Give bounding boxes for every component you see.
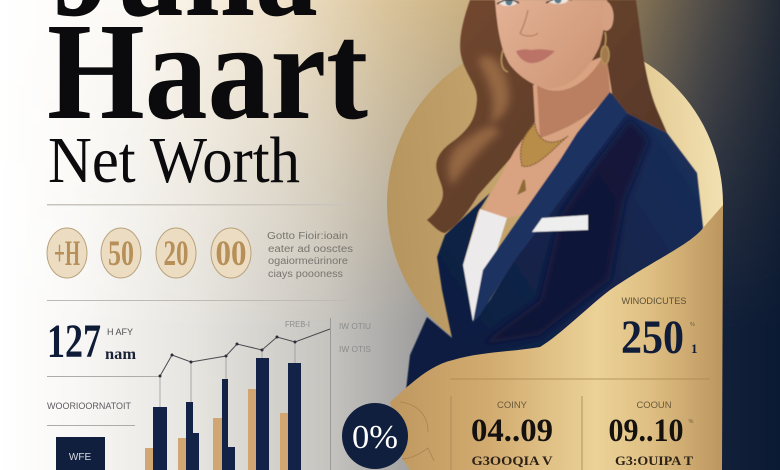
lips bbox=[516, 49, 555, 63]
title: name and net worth: Net Worth bbox=[48, 124, 300, 197]
stat: 127: H AFY bbox=[107, 327, 133, 337]
coin 2: 50 bbox=[108, 233, 134, 273]
stat: cooun: G3:OUIPA T bbox=[615, 453, 693, 468]
coin description text: ogaiormeürinore bbox=[268, 256, 348, 267]
eyes bbox=[497, 0, 572, 6]
small label: WOORIOORNATOIT bbox=[47, 401, 131, 412]
coin row bbox=[47, 228, 251, 278]
navy label box bbox=[56, 437, 105, 470]
back hair bbox=[427, 0, 667, 233]
chart labels: IW OTIS bbox=[339, 344, 371, 354]
lapel bbox=[473, 92, 627, 322]
coin description text bbox=[267, 231, 353, 280]
nose bbox=[520, 10, 538, 36]
right ear bbox=[602, 0, 614, 31]
jacket bbox=[406, 92, 703, 390]
jacket shadow bbox=[480, 118, 650, 345]
stat: cooun: 09..10 bbox=[608, 413, 684, 449]
neck shadow bbox=[537, 50, 610, 138]
stat: 127: 127 bbox=[47, 315, 101, 368]
stat: 250: 1 bbox=[691, 341, 698, 356]
coin 1: +H bbox=[54, 233, 80, 273]
coin 3 bbox=[156, 228, 196, 278]
coin 1 bbox=[47, 228, 87, 278]
neck and chest bbox=[482, 55, 612, 218]
stat: 250: 250 bbox=[621, 311, 684, 364]
chart labels bbox=[285, 319, 371, 354]
stat: cooun: COOUN bbox=[636, 400, 672, 410]
bars bbox=[145, 358, 301, 470]
line series bbox=[158, 329, 330, 407]
coin description text: ciays poooness bbox=[268, 269, 343, 280]
necklace bbox=[519, 124, 568, 193]
stat: coiny bbox=[471, 400, 553, 468]
stat: cooun bbox=[608, 400, 694, 468]
panel dividers bbox=[450, 379, 710, 470]
stat: 250: % bbox=[690, 322, 695, 328]
stat: coiny: 04..09 bbox=[471, 413, 553, 449]
percent badge: 0% bbox=[352, 419, 398, 456]
coin 3: 20 bbox=[164, 233, 188, 273]
coin description text: Gotto Fioir:ioain bbox=[267, 231, 348, 242]
pocket square bbox=[532, 215, 588, 232]
coin description text: eater ad oosctes bbox=[268, 244, 353, 255]
highlights in hair bbox=[448, 56, 509, 185]
stat: 127: nam bbox=[105, 346, 137, 363]
coin 2 bbox=[101, 228, 141, 278]
combo chart bbox=[145, 318, 371, 470]
stat: coiny: G3OOQIA V bbox=[472, 453, 553, 468]
face bbox=[495, 0, 607, 88]
white top bbox=[463, 209, 507, 320]
chart labels: IW OTIU bbox=[339, 321, 371, 331]
badge arcs bbox=[400, 402, 434, 461]
stat: coiny: COINY bbox=[497, 400, 527, 410]
gold circle behind portrait bbox=[387, 36, 723, 372]
stat: 250: WINODICUTES bbox=[622, 296, 686, 307]
portrait bbox=[406, 0, 703, 390]
percent badge bbox=[342, 403, 408, 469]
navy label box: WFE bbox=[69, 452, 91, 463]
stat: cooun: % bbox=[689, 419, 694, 425]
earrings bbox=[501, 32, 609, 72]
chart labels: FREB-I bbox=[285, 319, 310, 329]
coin 4: 00 bbox=[216, 233, 246, 273]
gold lower panel bbox=[390, 205, 723, 470]
